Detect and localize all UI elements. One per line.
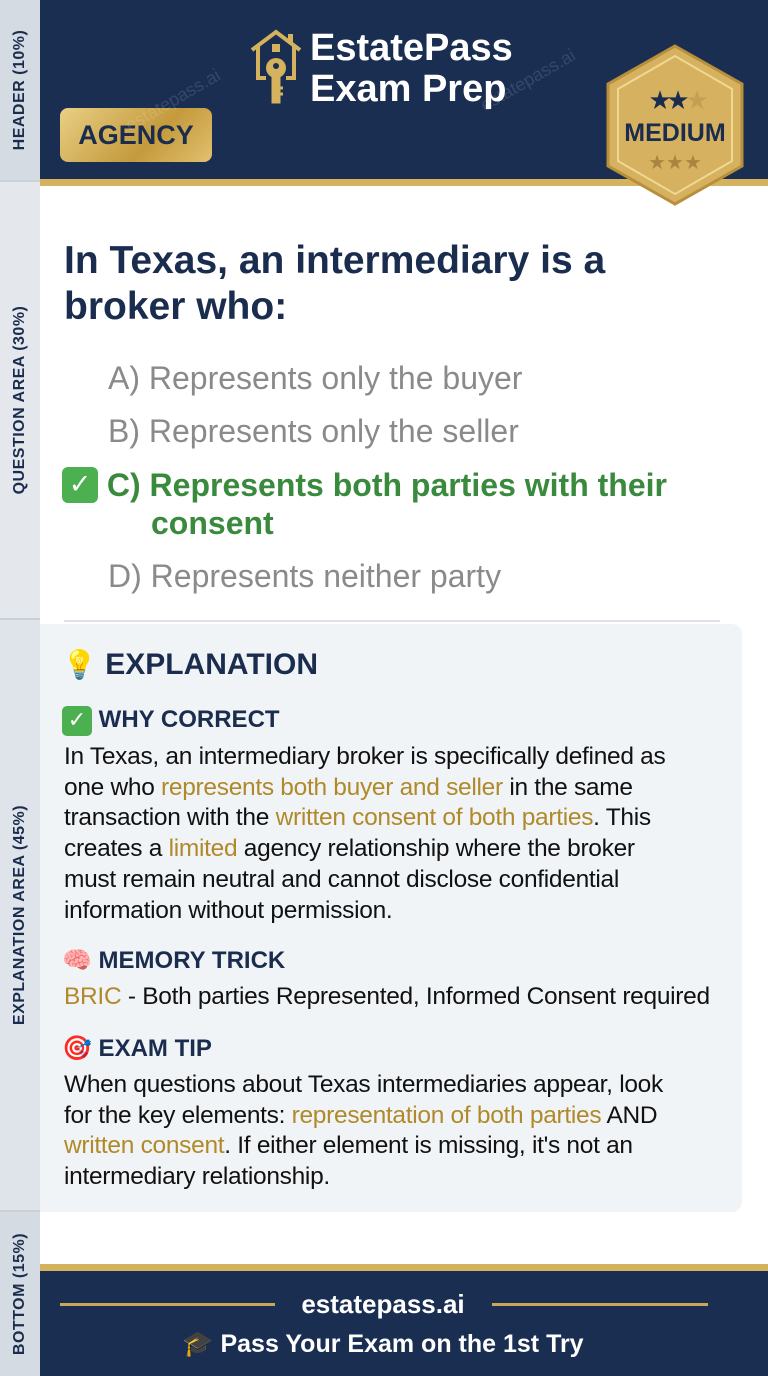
text: why correct: information without permission. bbox=[64, 897, 392, 924]
sidebar: header label bbox=[0, 0, 40, 182]
option D: D) Represents neither party bbox=[108, 558, 501, 594]
badge: MEDIUM difficulty hexagon: MEDIUM bbox=[624, 119, 726, 147]
option C correct bbox=[62, 467, 667, 541]
text: exam tip: for the key elements: representation of both parties AND bbox=[64, 1102, 657, 1129]
badge: MEDIUM difficulty hexagon: ★ bbox=[648, 86, 672, 116]
badge: MEDIUM difficulty hexagon: ★★★ bbox=[648, 150, 702, 174]
sidebar: explanation area label: EXPLANATION AREA (45%) bbox=[11, 805, 28, 1025]
option C correct: consent bbox=[151, 505, 274, 541]
icon: house key logo bbox=[250, 30, 302, 104]
option C correct: C) Represents both parties with their bbox=[107, 467, 667, 503]
watermarks: estatepass.ai bbox=[122, 65, 224, 135]
title: EstatePass Exam Prep bbox=[310, 27, 513, 110]
text: exam tip: When questions about Texas intermediaries appear, look bbox=[64, 1071, 663, 1098]
text: exam tip: intermediary relationship. bbox=[64, 1163, 330, 1190]
text: why correct: creates a limited agency relationship where the broker bbox=[64, 835, 635, 862]
footer url: estatepass.ai bbox=[301, 1289, 465, 1319]
text: why correct bbox=[64, 743, 665, 924]
heading: memory trick: 🧠 MEMORY TRICK bbox=[62, 946, 285, 974]
option C correct: ✓ bbox=[69, 469, 91, 500]
text: why correct: must remain neutral and cannot disclose confidential bbox=[64, 866, 619, 893]
heading: why correct: ✓ bbox=[68, 708, 86, 733]
option B: B) Represents only the seller bbox=[108, 413, 519, 449]
panel: explanation bbox=[40, 624, 742, 1212]
sidebar: question area label: QUESTION AREA (30%) bbox=[11, 306, 28, 494]
options list bbox=[62, 360, 667, 594]
text: why correct: In Texas, an intermediary broker is specifically defined as bbox=[64, 743, 665, 770]
heading: exam tip: 🎯 EXAM TIP bbox=[62, 1034, 212, 1062]
sidebar: bottom label bbox=[0, 1212, 40, 1376]
heading: EXPLANATION: 💡 EXPLANATION bbox=[62, 648, 318, 681]
header panel bbox=[40, 0, 768, 186]
option A: A) Represents only the buyer bbox=[108, 360, 522, 396]
text: exam tip: written consent. If either element is missing, it's not an bbox=[64, 1132, 633, 1159]
text: why correct: transaction with the written consent of both parties. This bbox=[64, 804, 651, 831]
badge: MEDIUM difficulty hexagon bbox=[606, 44, 744, 206]
sidebar: header label: HEADER (10%) bbox=[11, 30, 28, 150]
text: estatepass.ai bbox=[477, 45, 579, 115]
text: exam tip bbox=[64, 1071, 664, 1190]
badge: MEDIUM difficulty hexagon: ★ bbox=[666, 86, 690, 116]
badge: MEDIUM difficulty hexagon: ★ bbox=[685, 86, 709, 116]
footer tagline: 🎓 Pass Your Exam on the 1st Try bbox=[182, 1329, 584, 1358]
question heading bbox=[64, 239, 606, 328]
sidebar: question area label bbox=[0, 182, 40, 620]
title: EstatePass Exam Prep: Exam Prep bbox=[310, 68, 506, 110]
question heading: In Texas, an intermediary is a bbox=[64, 239, 605, 282]
heading: why correct: WHY CORRECT bbox=[99, 706, 280, 733]
text: memory trick: BRIC - Both parties Represented, Informed Consent required bbox=[64, 983, 710, 1010]
badge: AGENCY bbox=[60, 108, 212, 162]
footer panel bbox=[40, 1264, 768, 1376]
sidebar: bottom label: BOTTOM (15%) bbox=[11, 1233, 28, 1355]
title: EstatePass Exam Prep: EstatePass bbox=[310, 27, 513, 69]
sidebar: explanation area label bbox=[0, 620, 40, 1212]
question heading: broker who: bbox=[64, 285, 287, 328]
text: why correct: one who represents both buyer and seller in the same bbox=[64, 774, 633, 801]
badge: AGENCY: AGENCY bbox=[78, 120, 194, 150]
